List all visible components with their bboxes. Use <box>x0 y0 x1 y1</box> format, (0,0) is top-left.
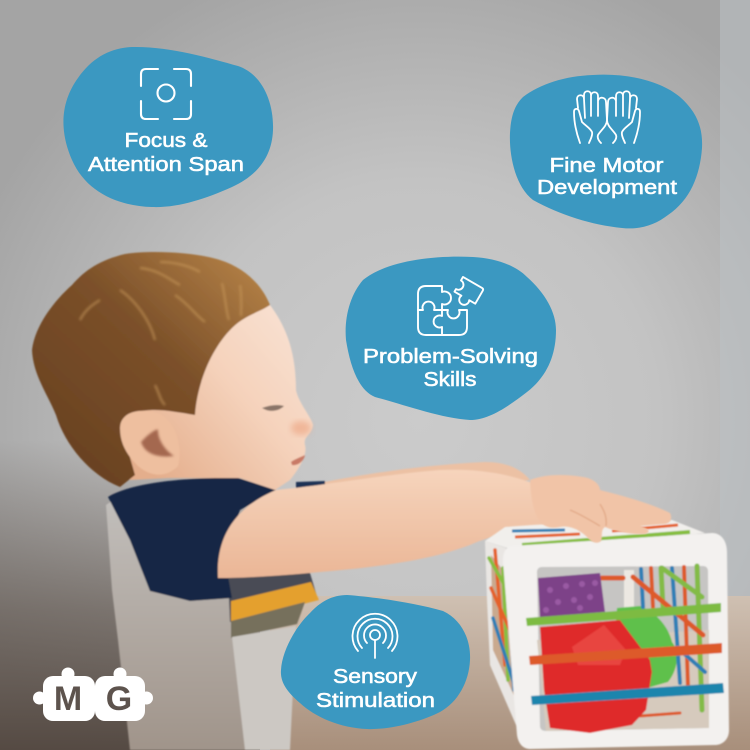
badge: sensory stimulation <box>281 595 470 729</box>
icon: puzzle pieces <box>418 277 484 335</box>
blob <box>281 595 470 729</box>
eye <box>262 405 284 411</box>
icon: open hands <box>574 91 640 143</box>
logo: MG puzzle <box>33 668 153 721</box>
front opening <box>537 566 709 731</box>
text: Attention Span <box>88 154 244 176</box>
hand over cube edge <box>530 475 671 543</box>
icon: focus target <box>141 69 191 119</box>
badge: focus and attention span <box>63 47 273 207</box>
mouth <box>291 455 305 465</box>
ear <box>120 411 179 475</box>
text: Development <box>537 177 678 199</box>
blue band <box>531 683 724 705</box>
cube front frame <box>503 533 729 749</box>
blob <box>63 47 273 207</box>
icon: signal antenna <box>352 614 398 658</box>
green band <box>526 603 721 626</box>
logo letter G: G <box>106 680 132 718</box>
green shape <box>615 606 677 690</box>
text: Sensory <box>333 666 417 688</box>
side bands <box>489 550 517 693</box>
logo pieces <box>33 668 153 721</box>
blob <box>510 75 702 228</box>
badge: problem-solving skills <box>346 257 556 420</box>
cube top face <box>485 520 705 552</box>
logo letter M: M <box>54 680 82 718</box>
text: Stimulation <box>316 690 435 712</box>
orange band <box>529 643 722 665</box>
red shape facet <box>572 625 626 665</box>
cube side face <box>485 541 526 748</box>
white post <box>624 570 634 608</box>
text: Fine Motor <box>550 155 664 177</box>
navy sleeve <box>108 478 276 601</box>
toy: sensory cube <box>485 520 729 749</box>
gray shirt body <box>106 488 246 750</box>
inner ear <box>141 430 174 457</box>
red shape <box>540 620 652 733</box>
opening floor <box>537 630 709 731</box>
text: Skills <box>424 369 476 391</box>
purple square <box>538 573 605 618</box>
far arm <box>296 462 530 492</box>
text: Problem-Solving <box>363 346 538 368</box>
inner bands <box>602 566 705 716</box>
hair highlights <box>80 262 241 405</box>
nose shade <box>291 421 311 435</box>
hair <box>32 252 270 487</box>
photo: toddler <box>32 252 560 750</box>
badge: fine motor development <box>510 75 702 228</box>
near arm <box>218 470 560 578</box>
neck and face <box>120 305 313 490</box>
text: Focus & <box>124 130 208 152</box>
side opening <box>491 555 516 700</box>
top face bands <box>512 525 690 548</box>
blob <box>346 257 556 420</box>
shirt stripes <box>228 573 319 750</box>
far sleeve <box>296 481 325 492</box>
